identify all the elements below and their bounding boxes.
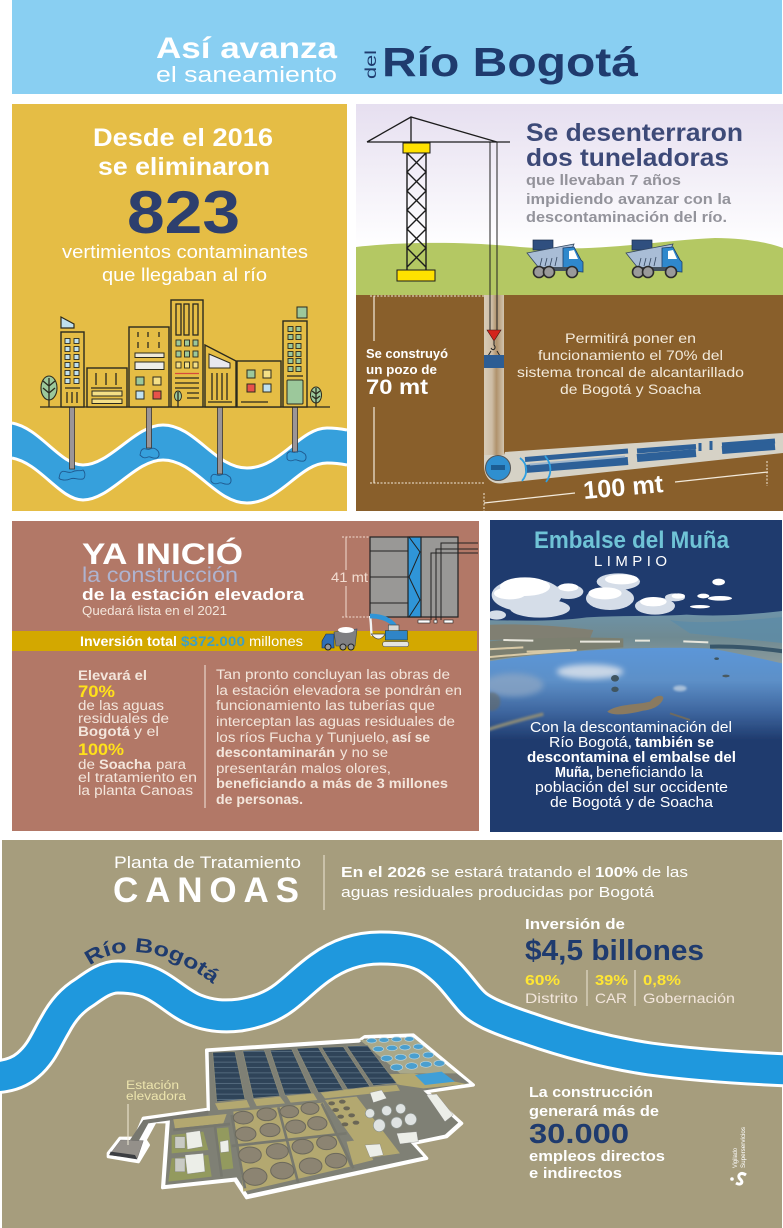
text: vertimientos contaminantes: vertimientos contaminantes: [62, 242, 308, 262]
text: En el 2026: En el 2026: [341, 864, 426, 881]
panel: tunnelling machines: [356, 104, 783, 511]
building 3: [129, 327, 169, 407]
text: En el 2026: 100%: [595, 864, 638, 881]
text: generará más de: generará más de: [529, 1104, 659, 1120]
text: Con la descontaminación: de Bogotá y de Soacha: [550, 795, 714, 811]
illustration: crane: [367, 117, 510, 281]
breakdown: 39% CAR: CAR: [595, 990, 627, 1006]
text: Con la descontaminación: descontamina el embalse del: [527, 750, 736, 766]
heading: dos tuneladoras: dos tuneladoras: [526, 144, 729, 172]
text: elevará el 70%: residuales de: [78, 711, 169, 726]
text: pozo de 70 mt: Se construyó: [366, 347, 448, 361]
text: permitirá poner: de Bogotá y Soacha: [560, 381, 701, 397]
logo: Superservicios: [730, 1126, 747, 1184]
text: pozo de 70 mt: [366, 347, 448, 399]
text: obras de la estación: la estación elevadora se pondrán en: [216, 683, 462, 698]
illustration: river banks: [12, 423, 347, 503]
text: obras de la estación: [216, 667, 462, 807]
text: tunnelling description: que llevaban 7 años: [526, 172, 681, 189]
white buildings: [175, 1090, 453, 1174]
breakdown: 0,8% Gobernación: Gobernación: [643, 990, 735, 1006]
aeration tanks: [213, 1045, 397, 1102]
text: e indirectos: e indirectos: [529, 1166, 622, 1182]
illustration: discharge pipes: [59, 407, 306, 484]
illustration: brown ground: [356, 295, 783, 511]
text: elevará el 70%: el tratamiento en: [78, 770, 197, 785]
text: elevará el 70%: [78, 668, 197, 798]
text: Quedará lista: Quedará lista en el 2021: [82, 604, 227, 618]
text: Inversión total: [80, 634, 303, 649]
text: Con la descontaminación: Muña,: [555, 765, 593, 781]
text: permitirá poner: funcionamiento el 70% del: [538, 347, 723, 363]
figure: 30.000: 30.000: [529, 1118, 629, 1149]
small digesters: [328, 1100, 359, 1126]
text: elevará el 70%: de las aguas: [78, 698, 164, 713]
label: Estación elevadora: [126, 1080, 187, 1103]
panel: 823 discharges eliminated: [12, 104, 347, 511]
breakdown: 0,8% Gobernación: 0,8%: [643, 973, 681, 989]
heading: LIMPIO: LIMPIO: [594, 553, 667, 570]
illustration: green hill: [356, 238, 783, 296]
panel: Planta Canoas: [0, 840, 783, 1228]
text: Inversión total: millones: [249, 634, 303, 649]
label: Estación elevadora: elevadora: [126, 1091, 187, 1103]
text: En el 2026: [341, 864, 688, 901]
text: obras de la estación: funcionamiento las tuberías que: [216, 698, 435, 713]
diagram: 41 mt building: [342, 537, 478, 623]
building 4: [171, 300, 203, 407]
label: Río Bogotá on curve: Río Bogotá: [84, 938, 220, 984]
text: Con la descontaminación: beneficiando la: [596, 765, 704, 781]
building 5: [205, 345, 236, 407]
text: empleos directos: empleos directos: [529, 1149, 665, 1165]
text: En el 2026: se estará tratando el: [431, 864, 591, 881]
heading: el saneamiento: el saneamiento: [156, 62, 337, 87]
panel: header: [12, 0, 782, 94]
circular blue tanks: [367, 1037, 445, 1071]
text: elevará el 70%: para: [156, 757, 187, 772]
text: tunnelling description: impidiendo avanzar con la: [526, 191, 732, 208]
heading: Así avanza: Así avanza: [156, 32, 337, 65]
breakdown: 60% Distrito: [525, 973, 578, 1006]
heading: Embalse del Muña: Embalse del Muña: [534, 527, 730, 554]
text: Inversión total: $372.000: [181, 634, 245, 649]
rotated word: del: del: [363, 50, 380, 79]
text: En el 2026: de las: [642, 864, 688, 881]
building 2: [87, 368, 127, 407]
right tree: [310, 387, 322, 407]
text: elevará el 70%: y el: [134, 724, 159, 739]
text: Con la descontaminación: también se: [635, 735, 714, 751]
truck 1: [527, 240, 583, 278]
illustration: treatment plant aerial view: [108, 1035, 473, 1198]
text: obras de la estación: descontaminarán: [216, 745, 335, 760]
text: En el 2026: aguas residuales producidas por Bogotá: [341, 884, 655, 901]
text: obras de la estación: de personas.: [216, 792, 303, 807]
text: que llegaban al río: que llegaban al río: [102, 265, 267, 285]
panel: estación elevadora: [12, 521, 479, 831]
text: elevará el 70%: de: [78, 757, 95, 772]
photo: reservoir with clouds: [483, 573, 783, 743]
text: elevará el 70%: 70%: [78, 682, 115, 701]
heading: se eliminaron: se eliminaron: [98, 153, 270, 181]
text: permitirá poner: [517, 330, 744, 397]
sand and grass patches: [173, 1037, 467, 1192]
text: La construcción: La construcción: [529, 1085, 653, 1101]
icon: small truck: [322, 627, 357, 650]
text: permitirá poner: sistema troncal de alcantarillado: [517, 364, 744, 380]
silos: [365, 1104, 417, 1132]
panel: Embalse del Muña: [483, 520, 783, 832]
breakdown: 60% Distrito: 60%: [525, 973, 560, 989]
logo: Superservicios: Superservicios: [740, 1126, 747, 1168]
dimension: 70 mt: [370, 296, 484, 483]
label: 100 mt: 100 mt: [582, 470, 665, 505]
building 1: [61, 317, 84, 407]
breakdown: 39% CAR: [595, 973, 628, 1006]
text: pozo de 70 mt: 70 mt: [366, 376, 428, 399]
text: tunnelling description: [526, 172, 732, 226]
breakdown: 60% Distrito: Distrito: [525, 990, 578, 1006]
text: Con la descontaminación: Con la descontaminación del: [530, 720, 732, 736]
dimension: 100 mt: [484, 461, 768, 511]
text: obras de la estación: beneficiando a más de 3 millones: [216, 776, 448, 791]
left tree: [41, 376, 57, 407]
text: elevará el 70%: Bogotá: [78, 724, 131, 739]
band: total investment background: [12, 631, 477, 651]
elevator station: [109, 1140, 143, 1159]
clouds: [487, 573, 732, 620]
text: Con la descontaminación: Río Bogotá,: [549, 735, 632, 751]
building 7: [283, 307, 307, 407]
heading: YA INICIÓ: YA INICIÓ: [82, 537, 243, 571]
lake reflections: [483, 657, 730, 730]
mountains: [490, 611, 782, 664]
text: Inversión de: Inversión de: [525, 916, 625, 933]
text: obras de la estación: interceptan las aguas residuales de: [216, 714, 455, 729]
heading: Desde el 2016: Desde el 2016: [93, 124, 273, 152]
heading: Planta de Tratamiento: Planta de Tratamiento: [114, 854, 301, 872]
text: pozo de 70 mt: un pozo de: [366, 363, 437, 377]
label: Estación elevadora: Estación: [126, 1080, 179, 1092]
illustration: river waves: [12, 423, 347, 503]
building 6: [237, 361, 281, 407]
lake: [487, 648, 783, 743]
icon: excavator: [370, 616, 409, 647]
clarifier tanks: [233, 1102, 347, 1185]
logo: Superservicios: Vigilado: [732, 1148, 739, 1168]
illustration: crane cables and hook: [484, 142, 504, 368]
illustration: Río Bogotá river: [0, 948, 783, 1077]
text: obras de la estación: así se: [392, 730, 430, 745]
big number 823: 823: [127, 179, 240, 246]
heading: Se desenterraron: Se desenterraron: [526, 119, 743, 147]
text: elevará el 70%: Elevará el: [78, 668, 147, 683]
text: tunnelling description: descontaminación del río.: [526, 209, 727, 226]
label: 41 mt: 41 mt: [331, 569, 368, 585]
heading: Río Bogotá: Río Bogotá: [382, 39, 638, 85]
truck 2: [626, 240, 682, 278]
figure: $4,5 billones: $4,5 billones: [525, 935, 704, 967]
text: Con la descontaminación: población del sur occidente: [535, 780, 728, 796]
illustration: tunnel pipe: [484, 433, 783, 484]
heading: la construcción: la construcción: [82, 564, 238, 587]
heading: de la estación elevadora: de la estación elevadora: [82, 585, 305, 604]
breakdown: 0,8% Gobernación: [643, 973, 735, 1006]
text: Con la descontaminación: [527, 720, 736, 811]
text: obras de la estación: y no se: [340, 745, 388, 760]
illustration: vertical shaft: [484, 295, 504, 465]
roads: [173, 1103, 353, 1188]
text: elevará el 70%: la planta Canoas: [78, 783, 193, 798]
text: obras de la estación: Tan pronto concluyan las obras de: [216, 667, 450, 682]
illustration: city skyline: [40, 300, 330, 407]
text: permitirá poner: Permitirá poner en: [565, 330, 696, 346]
illustration: dump trucks: [527, 240, 682, 278]
text: Inversión total: Inversión total: [80, 634, 177, 649]
heading: CANOAS: CANOAS: [113, 871, 299, 910]
text: obras de la estación: los ríos Fucha y Tunjuelo,: [216, 730, 389, 745]
text: obras de la estación: presentarán malos olores,: [216, 761, 391, 776]
text: elevará el 70%: 100%: [78, 740, 124, 759]
breakdown: 39% CAR: 39%: [595, 973, 628, 989]
text: elevará el 70%: Soacha: [99, 757, 152, 772]
